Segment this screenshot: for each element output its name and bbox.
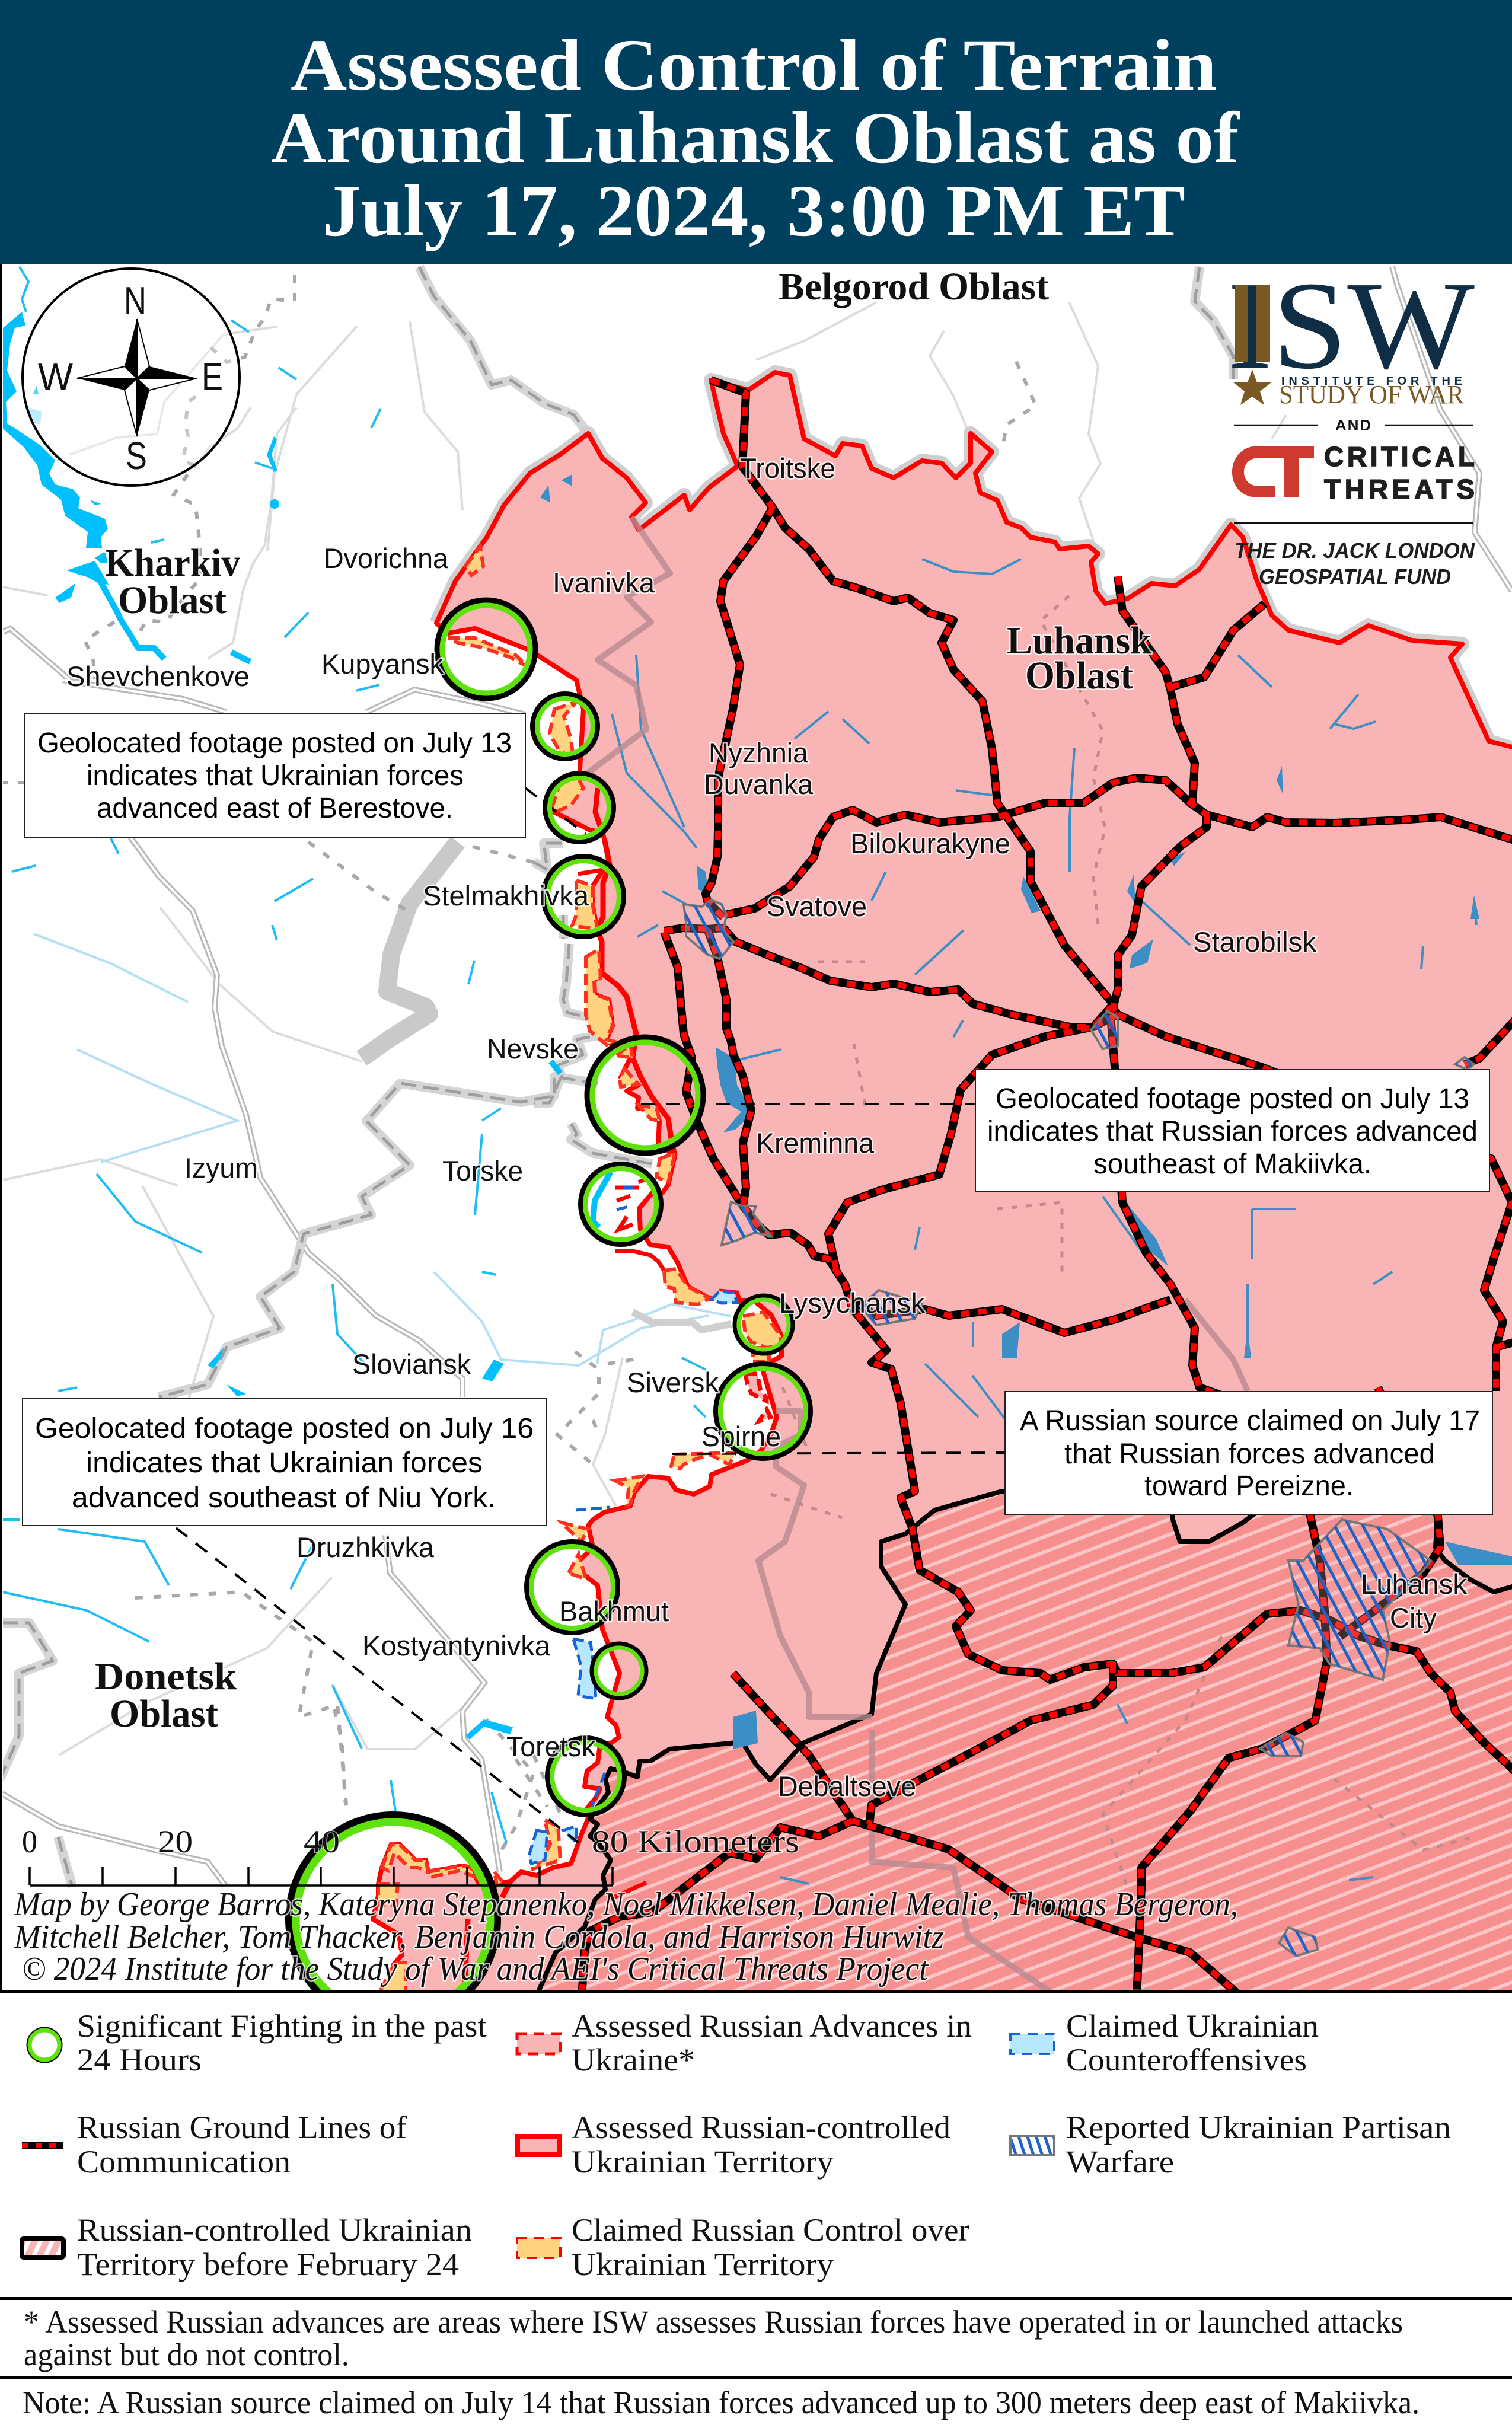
callout: Pereizne: toward Pereizne.	[1144, 1470, 1354, 1502]
title: Assessed Control of Terrain	[291, 24, 1217, 106]
circle: Spirne	[716, 1364, 811, 1459]
legend: Russian-controlled: Assessed Russian-controlled	[572, 2110, 950, 2145]
map credits: Map by George Barros, Kateryna Stepanenko, Noel Mikkelsen, Daniel Mealie, Thomas Bergeron,	[14, 1886, 1238, 1923]
header band	[0, 0, 1512, 264]
label: Luhansk Oblast: Luhansk	[1007, 619, 1151, 662]
settlement labels	[66, 452, 1467, 1802]
callout: Makiivka: Geolocated footage posted on July 13	[996, 1083, 1469, 1115]
label: Bakhmut: Bakhmut	[559, 1596, 669, 1627]
label: Donetsk Oblast: Donetsk	[95, 1655, 237, 1698]
ISW logo: INSTITUTE FOR THE	[1281, 375, 1462, 388]
legend: partisan warfare: Reported Ukrainian Partisan	[1066, 2110, 1451, 2145]
title: Around Luhansk Oblast as of	[271, 97, 1240, 178]
oblast borders	[0, 267, 1233, 1887]
label: Belgorod Oblast: Belgorod Oblast	[779, 265, 1049, 308]
circle: Pokrovsk direction	[289, 1815, 497, 2024]
circle: Berestove	[532, 694, 598, 759]
legend: Russian-controlled: Ukrainian Territory	[572, 2144, 834, 2180]
label: Luhansk City: Luhansk	[1361, 1568, 1467, 1600]
rivers on occupied land	[612, 559, 1476, 1884]
claimed Russian control areas	[378, 547, 781, 1992]
dotted lines on territory	[771, 596, 1470, 1885]
legend: significant fighting: Significant Fighting in the past	[77, 2008, 487, 2044]
leader lines	[176, 788, 1005, 1843]
callout: Makiivka	[975, 1070, 1489, 1192]
scale bar: 0	[22, 1824, 37, 1859]
note: Note: A Russian source claimed on July 14 that Russian forces advanced up to 300 meters deep east of Makiivka.	[23, 2385, 1420, 2420]
legend: significant fighting	[27, 2008, 487, 2078]
legend: before February 24	[22, 2212, 472, 2282]
label: Luhansk Oblast	[1007, 619, 1151, 697]
Critical Threats logo: THREATS	[1324, 474, 1475, 505]
territory halo	[436, 372, 1512, 750]
label: Siversk: Siversk	[627, 1367, 719, 1398]
label: Kharkiv Oblast: Oblast	[118, 579, 227, 622]
callout: Pereizne	[1005, 1392, 1492, 1514]
oblast border on territory	[588, 517, 1248, 2001]
callout: Makiivka: southeast of Makiivka.	[1093, 1148, 1371, 1180]
legend: significant fighting: 24 Hours	[77, 2042, 202, 2078]
callout: Berestove: Geolocated footage posted on July 13	[37, 728, 512, 759]
label: Nyzhnia: Nyzhnia	[709, 737, 809, 768]
scale bar: 20	[158, 1824, 193, 1859]
label: Dvorichna: Dvorichna	[324, 543, 449, 574]
circle: Chasiv Yar north	[527, 1542, 618, 1633]
label: Troitske: Troitske	[740, 452, 835, 484]
label: Lysychansk: Lysychansk	[779, 1287, 926, 1319]
partisan warfare areas	[684, 900, 1474, 1956]
label: Donetsk Oblast	[95, 1655, 237, 1735]
label: Debaltseve: Debaltseve	[778, 1770, 916, 1802]
rivers on white	[2, 267, 706, 1843]
map credits: © 2024 Institute for the Study of War and AEI's Critical Threats Project	[22, 1951, 929, 1987]
callout: Niu York: indicates that Ukrainian forces	[86, 1447, 483, 1479]
significant fighting circles	[289, 600, 811, 2024]
legend: GLOCs: Communication	[77, 2144, 291, 2180]
map credits	[14, 1886, 1238, 1987]
label: Kharkiv Oblast	[105, 541, 240, 622]
left frame line	[0, 264, 2, 1992]
scale bar: 80 Kilometers	[592, 1824, 799, 1859]
ISW logo	[1227, 256, 1475, 523]
ISW logo: STUDY OF WAR	[1279, 380, 1465, 409]
label: Stelmakhivka: Stelmakhivka	[423, 880, 589, 911]
circle: Terny	[580, 1164, 661, 1245]
compass rose: W	[38, 355, 74, 398]
footnote	[0, 2297, 1512, 2372]
label: Nevske: Nevske	[487, 1033, 579, 1064]
callout: Niu York: advanced southeast of Niu York.	[72, 1482, 496, 1514]
dotted raion lines	[0, 275, 1036, 1856]
callout: Berestove: advanced east of Berestove.	[97, 793, 453, 824]
legend: before February 24: Russian-controlled Ukrainian	[77, 2212, 472, 2248]
legend: claimed Russian control: Ukrainian Territory	[572, 2247, 834, 2282]
legend: before February 24: Territory before February 24	[77, 2247, 459, 2282]
label: Torske: Torske	[442, 1155, 523, 1186]
label: Kreminna: Kreminna	[756, 1127, 875, 1159]
label: Starobilsk: Starobilsk	[1193, 926, 1317, 958]
label: Duvanka: Duvanka	[704, 768, 814, 800]
compass rose: S	[126, 434, 147, 477]
label: Svatove: Svatove	[767, 891, 867, 922]
map credits: Mitchell Belcher, Tom Thacker, Benjamin Cordola, and Harrison Hurwitz	[14, 1919, 944, 1955]
label: Kupyansk: Kupyansk	[321, 648, 444, 679]
compass rose	[23, 269, 240, 486]
legend: assessed advances	[517, 2008, 972, 2078]
legend: assessed advances: Assessed Russian Advances in	[572, 2008, 972, 2044]
title: July 17, 2024, 3:00 PM ET	[323, 170, 1185, 251]
claimed Ukrainian counteroffensives	[529, 1291, 737, 1864]
compass rose: N	[124, 279, 146, 322]
legend: Russian-controlled	[518, 2110, 950, 2180]
label: Bilokurakyne: Bilokurakyne	[850, 828, 1010, 859]
Russian-controlled territory	[373, 372, 1512, 2001]
legend: assessed advances: Ukraine*	[572, 2042, 695, 2078]
label: Kostyantynivka: Kostyantynivka	[362, 1630, 551, 1661]
assessed Russian advances	[745, 1374, 771, 1421]
compass rose: E	[202, 355, 223, 398]
ISW logo: AND	[1335, 416, 1371, 434]
label: Druzhkivka: Druzhkivka	[296, 1532, 435, 1563]
front squiggles	[578, 870, 741, 1900]
double border near Siversk bend	[633, 1312, 731, 1330]
legend: claimed counteroffensives: Counteroffensives	[1066, 2042, 1307, 2078]
legend: claimed Russian control	[517, 2212, 969, 2282]
callout: Niu York: Geolocated footage posted on July 16	[35, 1413, 534, 1444]
Critical Threats logo: CRITICAL	[1324, 441, 1475, 472]
ISW logo: ISW	[1227, 256, 1475, 395]
Jack London fund credit	[1235, 538, 1475, 589]
legend panel	[0, 1990, 1512, 2299]
callout: Berestove	[25, 714, 525, 837]
title	[271, 24, 1240, 251]
label: Luhansk Oblast: Oblast	[1025, 654, 1133, 697]
callout: Makiivka: indicates that Russian forces advanced	[987, 1116, 1478, 1147]
legend: partisan warfare: Warfare	[1066, 2144, 1174, 2180]
label: Sloviansk: Sloviansk	[352, 1348, 471, 1380]
legend: claimed counteroffensives	[1010, 2008, 1319, 2078]
callout: Pereizne: A Russian source claimed on July 17	[1020, 1405, 1480, 1437]
circle: north of Stelmakhivka	[545, 773, 614, 842]
scale bar: 40	[304, 1824, 340, 1859]
map panel	[0, 256, 1512, 2024]
label: Spirne: Spirne	[701, 1421, 781, 1452]
Jack London fund credit: THE DR. JACK LONDON	[1235, 538, 1475, 563]
circle: Toretsk	[547, 1738, 624, 1815]
circle: Kupyansk	[437, 600, 535, 698]
label: Kharkiv Oblast: Kharkiv	[105, 541, 240, 585]
circle: Bilohorivka	[735, 1296, 793, 1354]
label: Ivanivka: Ivanivka	[553, 567, 655, 598]
callout: Pereizne: that Russian forces advanced	[1064, 1438, 1435, 1470]
footnote: against but do not control.	[24, 2337, 349, 2372]
Critical Threats logo	[1232, 441, 1475, 505]
legend: claimed Russian control: Claimed Russian Control over	[572, 2212, 969, 2248]
oblast labels	[95, 265, 1151, 1735]
legend: claimed counteroffensives: Claimed Ukrainian	[1066, 2008, 1319, 2044]
circle: Chasiv Yar south	[592, 1644, 646, 1698]
reservoir: Oskil	[3, 312, 513, 1740]
label: Shevchenkove: Shevchenkove	[66, 661, 250, 692]
main front line	[465, 788, 675, 1986]
Jack London fund credit: GEOSPATIAL FUND	[1259, 564, 1451, 589]
Russian ground lines of communication	[582, 380, 1512, 1998]
label: Izyum: Izyum	[184, 1152, 258, 1183]
thin roads on white	[3, 302, 1286, 1755]
legend: partisan warfare	[1010, 2110, 1451, 2180]
circle: Stelmakhivka	[543, 856, 624, 937]
occupied before February 24 territory	[534, 1491, 1512, 2001]
label: City: City	[1390, 1602, 1437, 1633]
pale pond	[28, 407, 42, 425]
callout: Niu York	[23, 1398, 546, 1526]
rail lines	[0, 267, 1512, 1885]
callout: Berestove: indicates that Ukrainian forces	[87, 760, 464, 792]
label: Toretsk: Toretsk	[506, 1731, 595, 1762]
footnote: * Assessed Russian advances are areas where ISW assesses Russian forces have operated in or launched attacks	[24, 2304, 1403, 2340]
circle: Makiivka	[587, 1037, 703, 1153]
legend: GLOCs: Russian Ground Lines of	[77, 2110, 407, 2145]
label: Donetsk Oblast: Oblast	[110, 1692, 218, 1735]
scale bar	[22, 1824, 799, 1885]
legend: GLOCs	[22, 2110, 407, 2180]
